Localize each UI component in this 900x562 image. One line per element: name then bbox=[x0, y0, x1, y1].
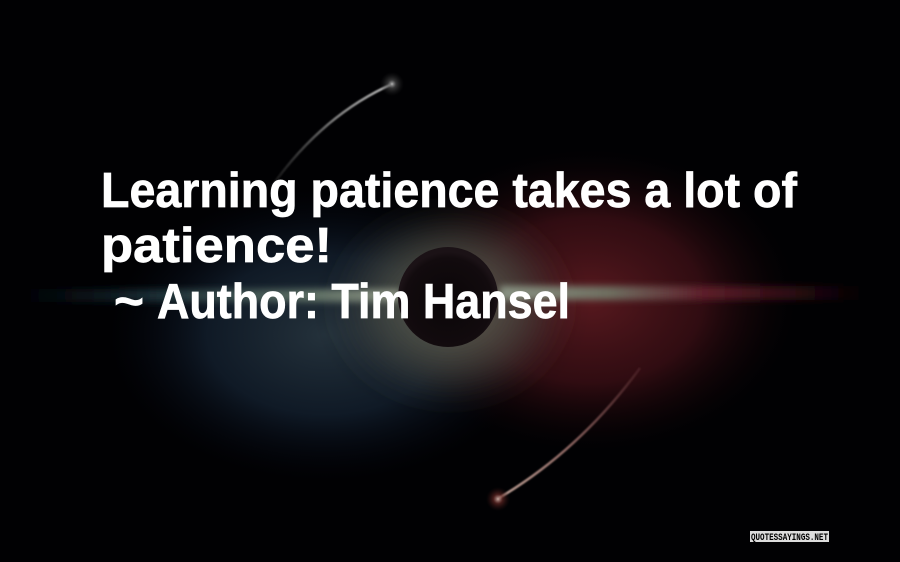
nebula glow: blue left, red right, pale halo around planet bbox=[110, 150, 795, 480]
author attribution: Author: Tim Hansel bbox=[157, 275, 570, 329]
horizontal light band behind planet bbox=[10, 286, 870, 302]
watermark: quotessayings.net: QUOTESSAYINGS.NET bbox=[751, 533, 828, 544]
watermark: quotessayings.net bbox=[750, 531, 829, 544]
upper arc with spark bbox=[272, 72, 404, 186]
quote text: patience! bbox=[101, 219, 332, 273]
author attribution: ~ bbox=[114, 275, 144, 329]
planet eclipse disc bbox=[398, 247, 498, 347]
quote text bbox=[101, 164, 798, 273]
lower arc with spark bbox=[486, 368, 640, 511]
quote text: Learning patience takes a lot of bbox=[101, 164, 798, 218]
